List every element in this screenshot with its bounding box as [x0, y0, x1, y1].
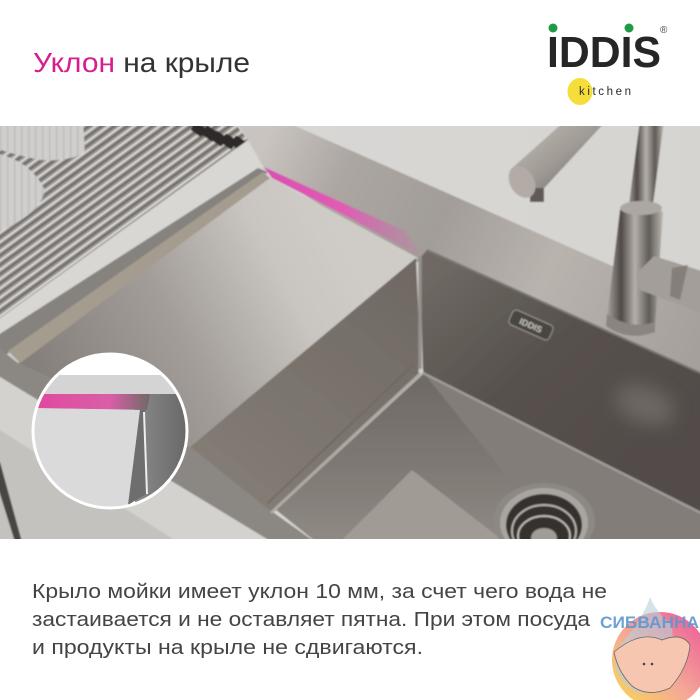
wing surface	[18, 176, 418, 447]
faucet lever	[640, 256, 700, 306]
faucet spout	[510, 126, 602, 189]
bowl left wall	[190, 258, 421, 512]
text block: description: и продукты на крыле не сдвигаются.	[32, 636, 423, 659]
text block: description: Крыло мойки имеет уклон 10 мм, за счет чего вода не	[32, 580, 607, 603]
watermark gradient circle	[612, 612, 700, 700]
drain	[498, 484, 594, 539]
badge: IDDIS plate: IDDIS	[518, 316, 544, 335]
flange	[239, 126, 700, 372]
logo: IDDIS kitchen	[547, 24, 668, 105]
watermark bath	[614, 637, 690, 693]
icon: green dots	[548, 24, 634, 33]
callout: magnified slope circle	[30, 350, 190, 510]
seams	[268, 258, 700, 515]
rack end caps	[190, 126, 246, 150]
photo: sink	[0, 120, 700, 559]
bowl rim	[427, 250, 700, 375]
watermark face	[643, 663, 653, 665]
text block: description	[32, 580, 607, 659]
floor light patch	[340, 470, 505, 542]
fold highlight	[144, 412, 147, 494]
countertop	[0, 120, 700, 545]
floor right	[426, 376, 700, 542]
spout end	[508, 168, 536, 198]
lower panel	[30, 408, 140, 510]
fold	[128, 410, 146, 505]
spout aerator	[530, 188, 544, 202]
dark right	[135, 394, 186, 502]
watermark drop	[615, 597, 675, 694]
counter front	[0, 427, 178, 542]
top white	[30, 350, 190, 375]
faucet base ring	[606, 314, 655, 336]
dish rack	[0, 120, 248, 322]
wall reflection	[614, 382, 676, 430]
cabinet gap line	[0, 462, 22, 542]
grey band	[44, 375, 176, 394]
registered mark: ®	[660, 25, 668, 36]
badge: IDDIS plate	[508, 309, 554, 341]
logo subtitle: kitchen	[579, 86, 631, 98]
circle border	[33, 354, 187, 508]
bowl right wall	[420, 250, 700, 516]
floor base	[276, 374, 592, 539]
white counter strip	[25, 392, 268, 539]
logo: IDDIS kitchen: IDDIS	[547, 28, 661, 77]
left lower flange	[0, 345, 315, 542]
white rim strip	[0, 140, 264, 340]
faucet collar top	[620, 201, 662, 215]
text block: description: застаивается и не оставляет пятна. При этом посуда	[32, 608, 591, 631]
faucet post	[628, 126, 664, 203]
pink slope marker	[264, 167, 420, 254]
bowl upper	[0, 126, 86, 162]
pink band	[30, 394, 150, 410]
recess grey band	[0, 168, 268, 362]
lever joint	[670, 265, 688, 300]
wing tan strip	[8, 172, 270, 363]
title: Уклон на крыле	[33, 47, 250, 78]
bowl lower	[0, 153, 45, 233]
watermark name: СИБВАННА	[600, 613, 699, 632]
watermark	[600, 597, 700, 700]
faucet collar	[607, 204, 663, 331]
icon: yellow blob	[568, 78, 592, 105]
